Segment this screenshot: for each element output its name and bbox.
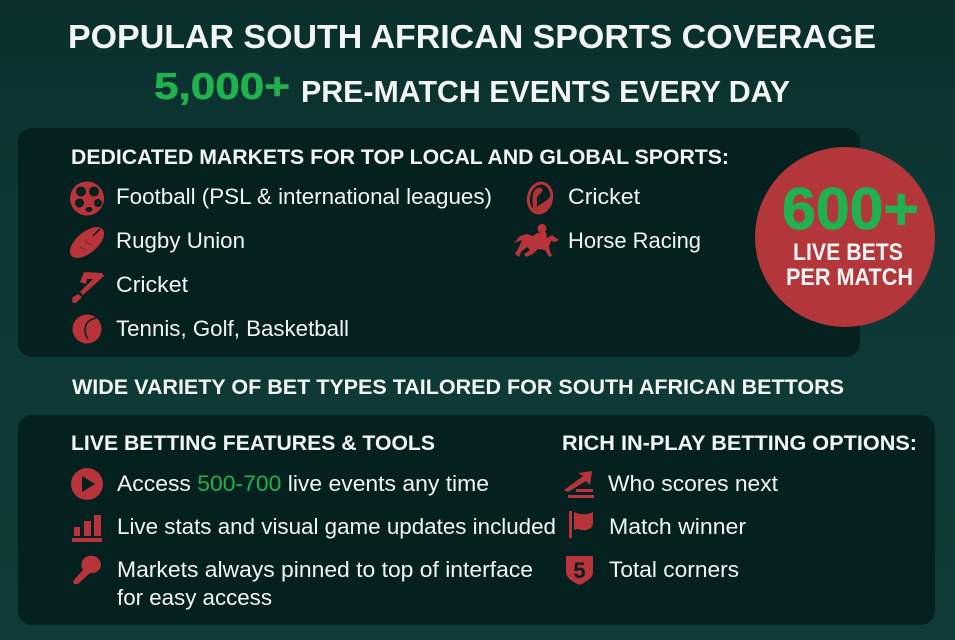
item: tennis golf basketball: Tennis, Golf, Basketball — [116, 316, 349, 341]
heading: live betting features: LIVE BETTING FEATURES & TOOLS — [71, 432, 435, 455]
item: live events — [71, 468, 489, 500]
item: pinned markets: for easy access — [117, 585, 272, 610]
badge: 600+ live bets per match: 600+ — [782, 176, 919, 242]
heading: bet types: WIDE VARIETY OF BET TYPES TAILORED FOR SOUTH AFRICAN BETTORS — [72, 376, 844, 399]
item: live stats: Live stats and visual game updates included — [117, 514, 556, 539]
item: football: Football (PSL & international leagues) — [116, 184, 492, 209]
item: cricket — [72, 272, 188, 303]
item: cricket ball: Cricket — [568, 184, 640, 209]
item: total corners — [566, 556, 739, 585]
subtitle: 5,000+ pre-match events: PRE-MATCH EVENTS EVERY DAY — [301, 74, 790, 109]
heading: dedicated markets: DEDICATED MARKETS FOR TOP LOCAL AND GLOBAL SPORTS: — [71, 146, 729, 169]
item: who scores next: Who scores next — [608, 471, 778, 496]
item: horse racing: Horse Racing — [568, 228, 701, 253]
item: match winner — [569, 511, 746, 539]
item: match winner: Match winner — [609, 514, 746, 539]
item: cricket ball — [526, 181, 640, 215]
item: total corners: Total corners — [609, 557, 739, 582]
item: total corners: 5 — [573, 558, 586, 583]
item: rugby union: Rugby Union — [116, 228, 245, 253]
item: pinned markets — [73, 556, 533, 610]
subtitle: 5,000+ pre-match events: 5,000+ — [154, 65, 290, 107]
heading: in-play options: RICH IN-PLAY BETTING OPTIONS: — [562, 432, 917, 455]
item: football — [70, 182, 492, 216]
item: rugby union — [65, 221, 245, 264]
item: horse racing — [514, 224, 701, 257]
badge: 600+ live bets per match: PER MATCH — [786, 264, 913, 291]
panel: live betting — [18, 415, 935, 625]
badge: 600+ live bets per match — [755, 147, 935, 327]
item: cricket: Cricket — [116, 272, 188, 297]
title: POPULAR SOUTH AFRICAN SPORTS COVERAGE — [68, 19, 876, 56]
item: pinned markets: Markets always pinned to top of interface — [117, 557, 533, 582]
panel: dedicated markets — [18, 128, 860, 357]
item: live events: Access 500-700 live events any time — [117, 471, 489, 496]
badge: 600+ live bets per match: LIVE BETS — [793, 239, 903, 266]
subtitle: 5,000+ pre-match events — [154, 65, 790, 109]
